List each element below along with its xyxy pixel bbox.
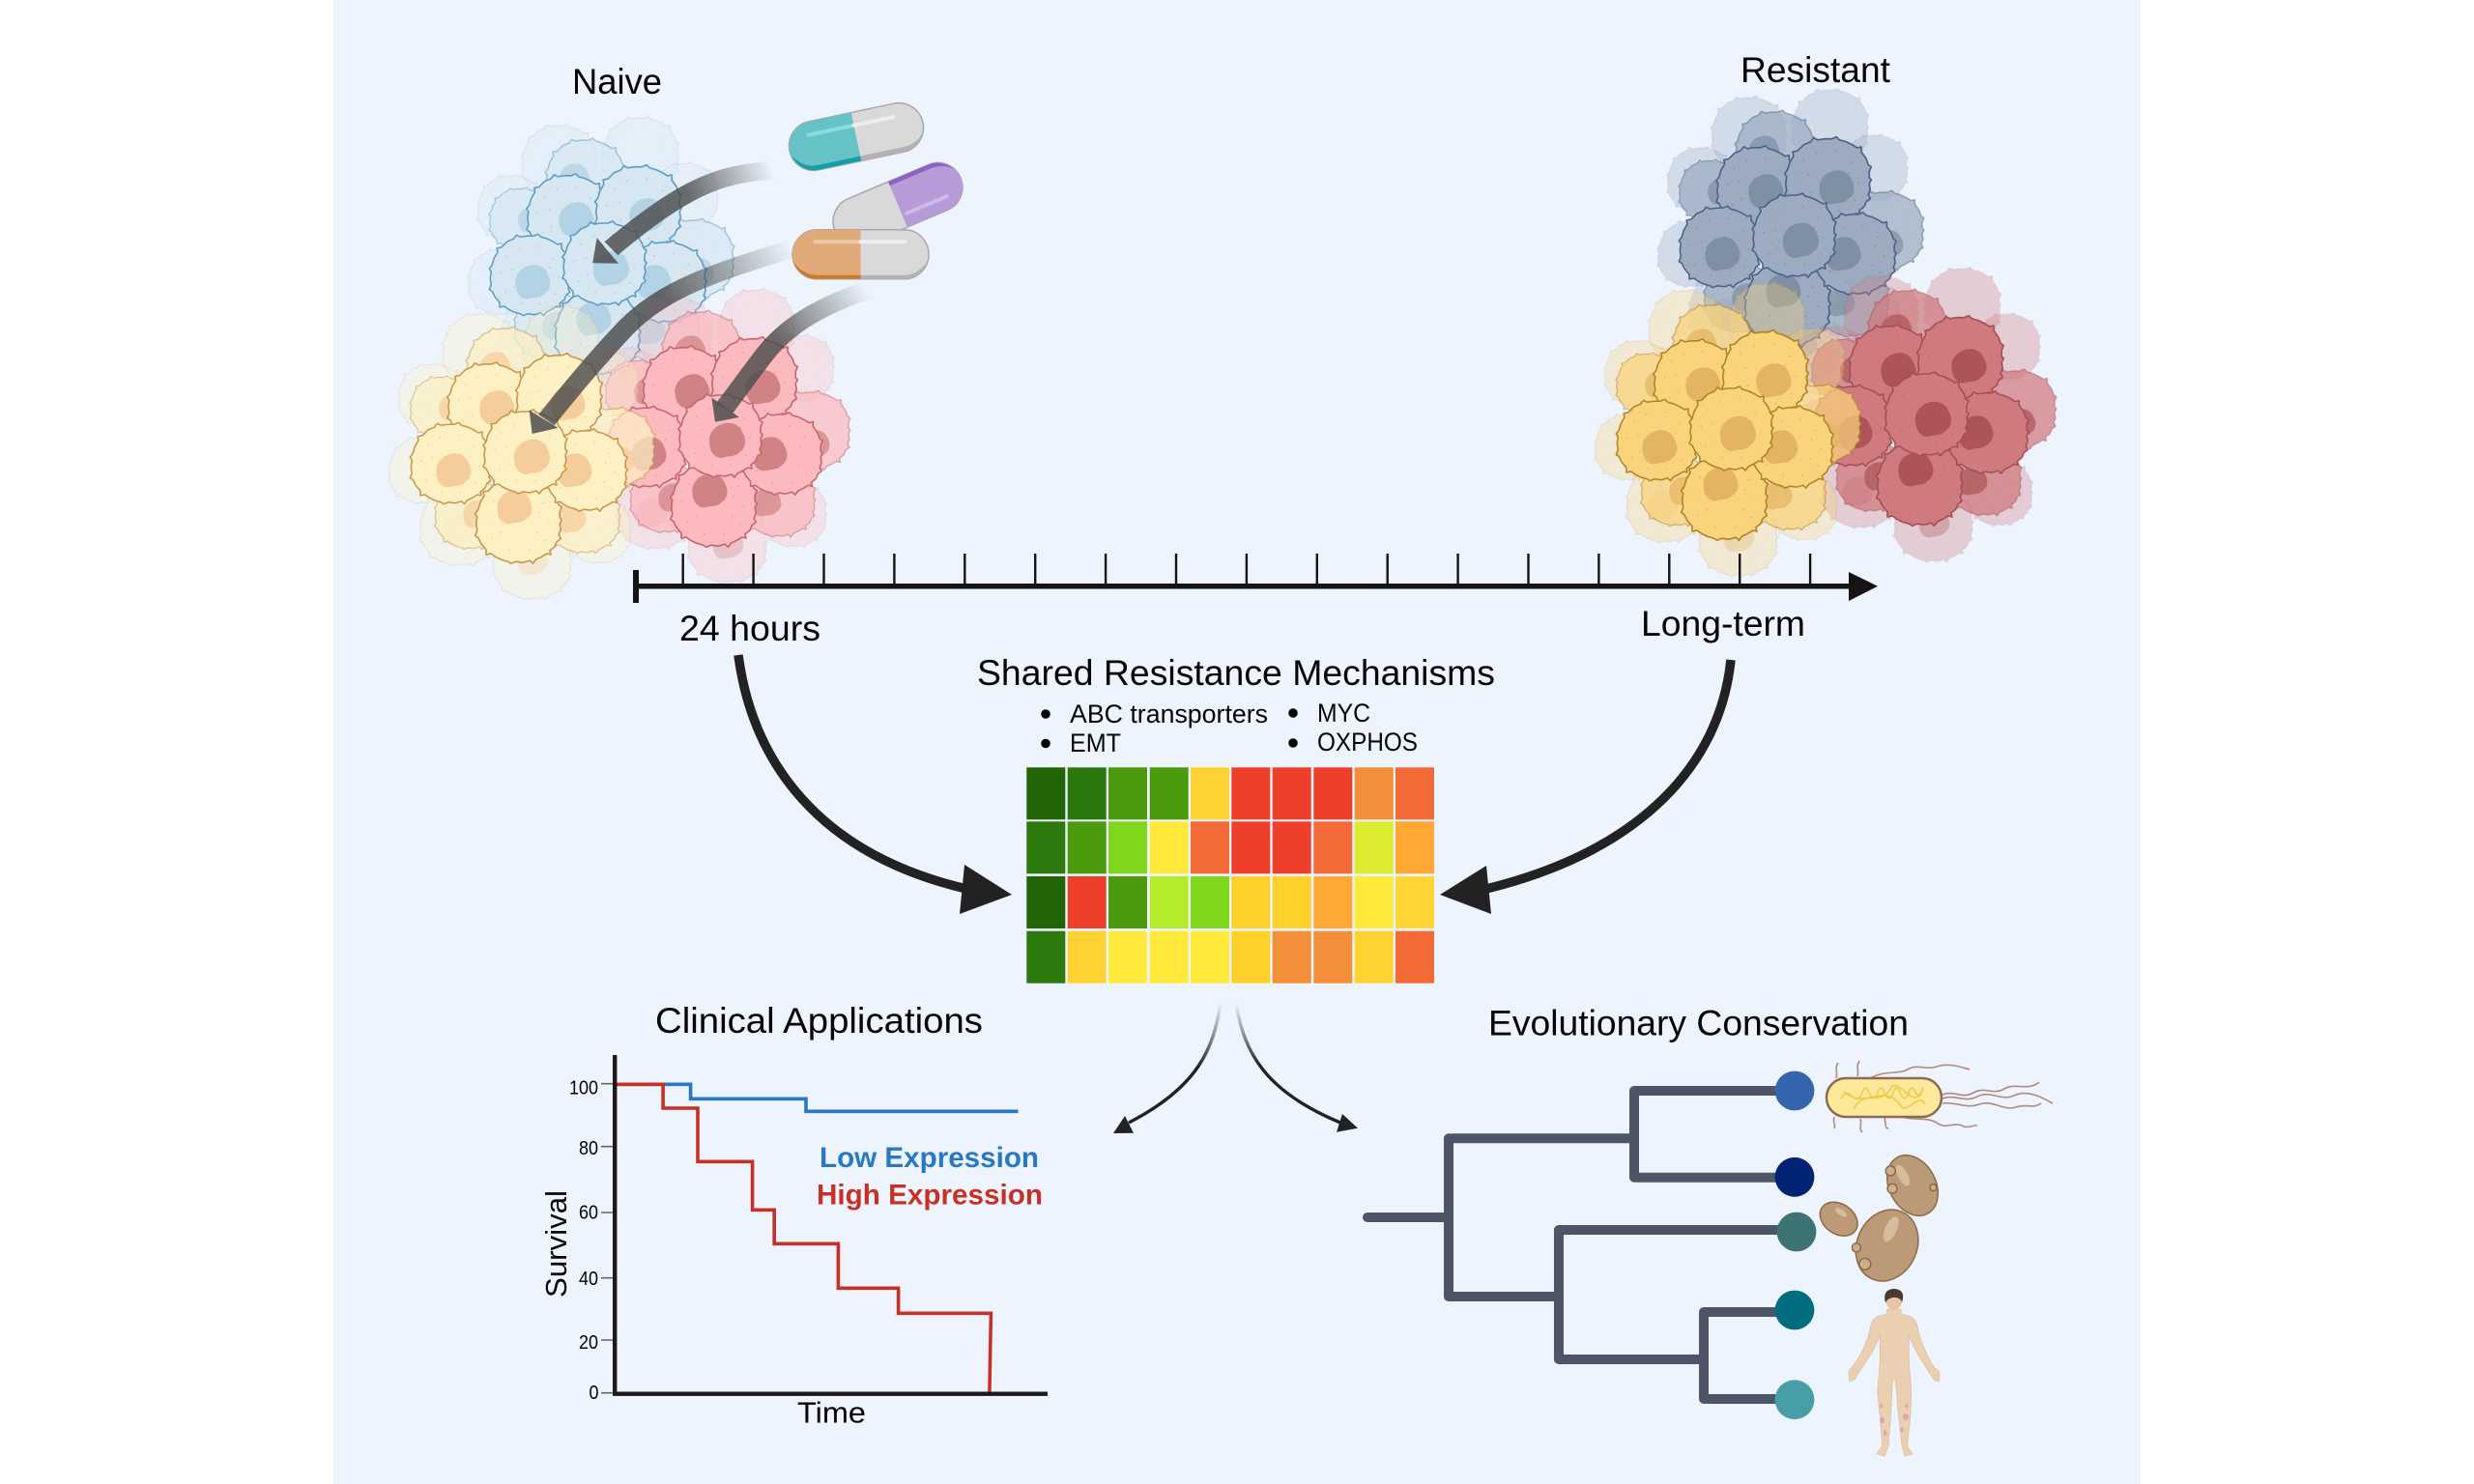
heading: Naive: Naive [572,62,662,101]
node: human 2 [1775,1380,1814,1419]
cell cluster: resistant red [1790,268,2057,562]
y-axis ticks [601,1084,615,1393]
icon: human figure [1849,1289,1940,1456]
pill: teal capsule [785,99,928,175]
heading: Evolutionary Conservation: Evolutionary Conservation [1488,1004,1909,1043]
tick labels: 60 [579,1203,598,1224]
bullet list: mechanisms: EMT [1070,728,1121,757]
node: bacteria 2 [1775,1157,1814,1197]
survival chart [539,1055,1048,1430]
heading: Resistant: Resistant [1740,50,1891,90]
axes [615,1055,1048,1394]
node: human 1 [1775,1291,1814,1329]
cell cluster: naive red [584,289,850,584]
drug arrows [530,170,868,434]
heatmap [1026,767,1434,984]
cell cluster: resistant blue [1657,89,1924,384]
tick labels: 80 [579,1138,598,1159]
legend: Low Expression: Low Expression [820,1142,1039,1174]
cell cluster: resistant yellow [1595,282,1861,577]
tick labels: 20 [579,1332,598,1354]
arrow: heatmap to evolutionary conservation [1236,1003,1358,1132]
bullet list: mechanisms: OXPHOS [1317,728,1418,756]
arrow: teal drug to blue cells [592,170,773,264]
arrow: 24 hours to heatmap [738,655,1012,914]
tick labels: 100 [569,1078,598,1099]
legend: High Expression: High Expression [817,1180,1043,1212]
timeline label: 24 hours: 24 hours [679,609,820,648]
bullet list: mechanisms: MYC [1317,699,1370,728]
arrow: heatmap to clinical applications [1113,1003,1221,1133]
tick labels [569,1078,599,1404]
node: fungi [1777,1213,1816,1251]
bullet list: mechanisms [1041,699,1418,757]
tree branches [1367,1091,1784,1399]
axis label: Time: Time [797,1396,866,1430]
cell cluster: naive blue [468,117,734,412]
arrow: orange drug to yellow cells [530,248,792,434]
icon: bacterium [1827,1061,2053,1132]
timeline [633,554,1878,603]
pill: orange capsule [792,230,929,279]
spore: upper [1876,1147,1948,1225]
spore: small [1814,1195,1864,1242]
tick labels: 40 [579,1269,598,1290]
phylogenetic tree [1367,1071,1816,1419]
spore: large [1843,1199,1929,1291]
high expression curve [615,1084,991,1393]
low expression curve [615,1084,1019,1111]
timeline label: Long-term: Long-term [1641,604,1805,643]
arrow: drug to red cells [711,290,868,422]
arrow: long-term to heatmap [1440,660,1731,914]
pill: purple capsule [825,156,970,254]
icon: fungal spores [1814,1147,1948,1291]
heading: Clinical Applications: Clinical Applications [655,1001,983,1041]
axis label: Survival: Survival [539,1190,573,1298]
bullet list: mechanisms: ABC transporters [1070,699,1268,728]
background panel [333,0,2141,1484]
node: bacteria 1 [1775,1071,1814,1110]
heading: Shared Resistance Mechanisms: Shared Resistance Mechanisms [977,653,1495,693]
tick labels: 0 [590,1383,599,1404]
cell cluster: naive yellow [388,305,655,600]
